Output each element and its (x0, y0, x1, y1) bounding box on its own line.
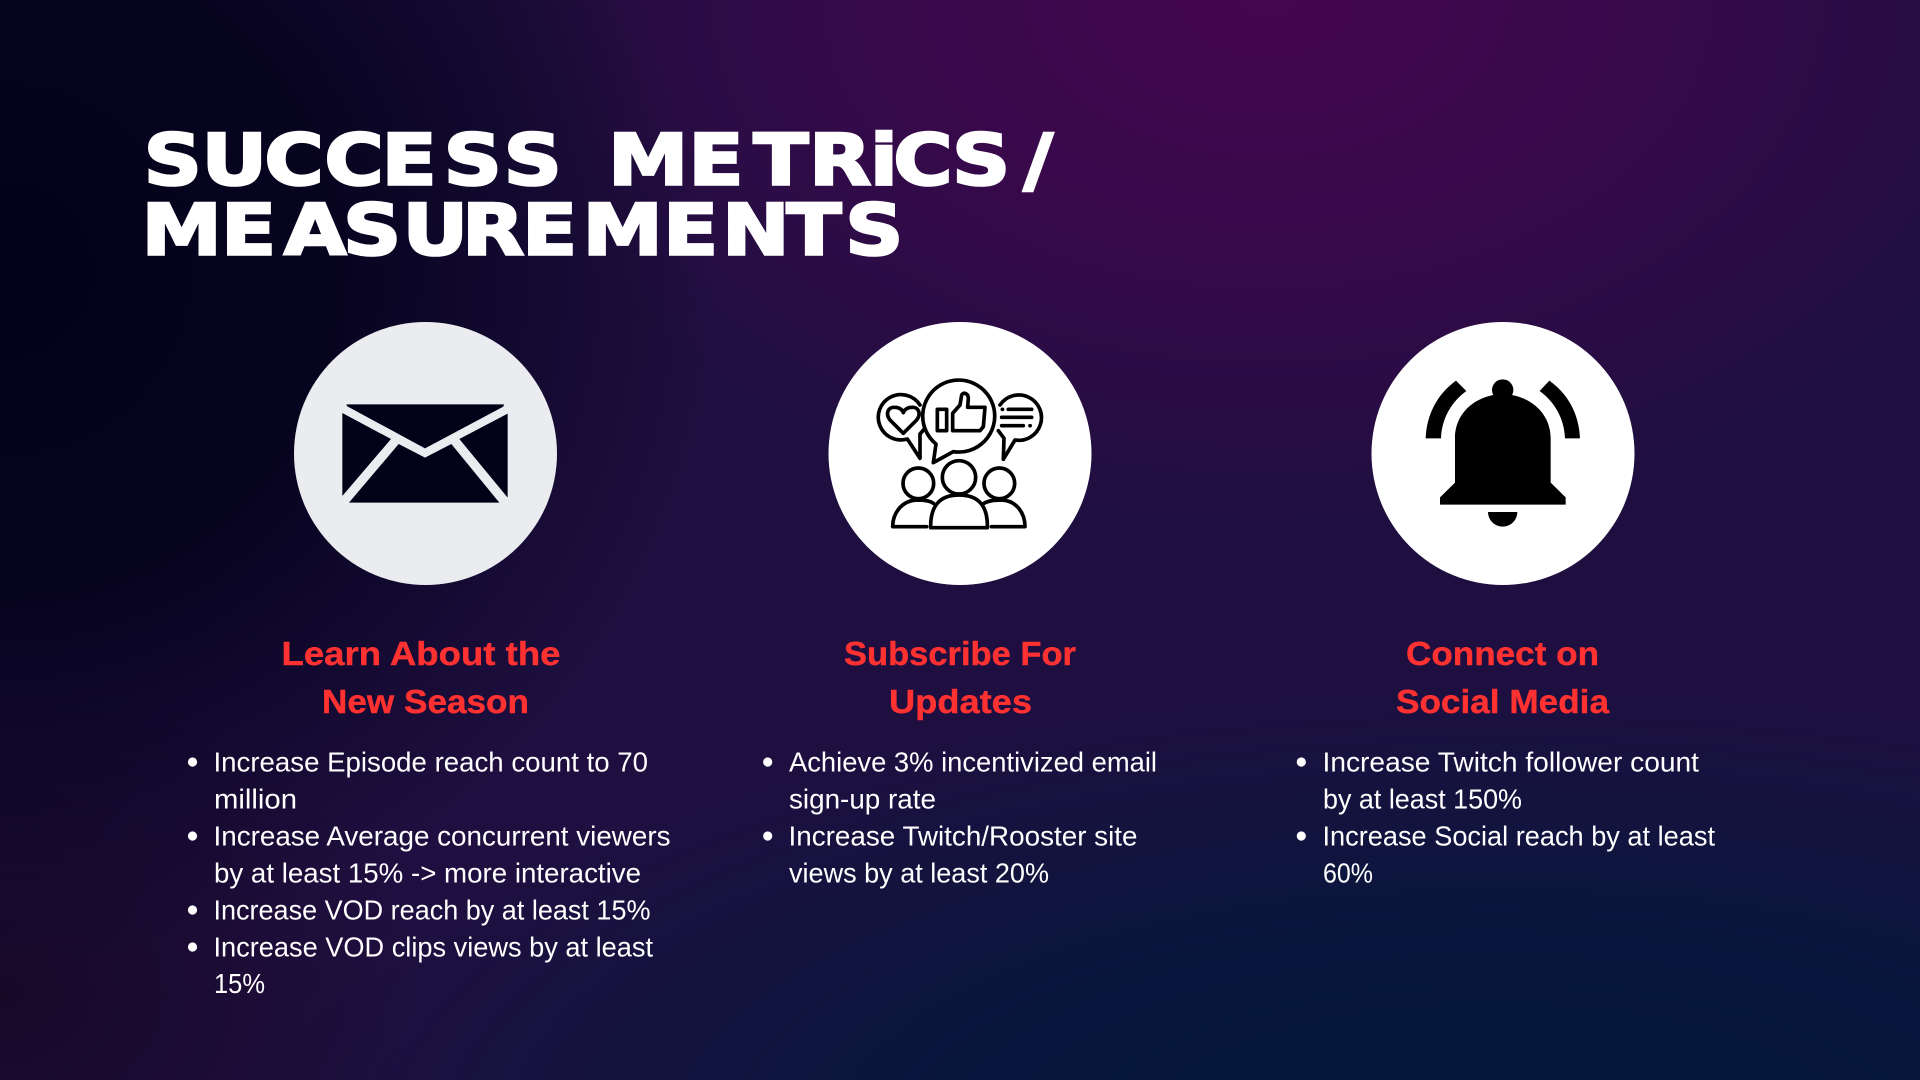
bullet list: subscription metrics: sign-up rate (789, 784, 936, 814)
bullet list: social metrics (1297, 746, 1715, 888)
title: SUCCESS METRiCS/ (144, 120, 1053, 201)
bullet list: episode metrics: Increase Average concurrent viewers (214, 820, 670, 852)
bullet list: subscription metrics: views by at least 20% (789, 858, 1049, 888)
icon: notification bell (1372, 322, 1634, 585)
heading: connect on social media: Connect on (1406, 635, 1599, 672)
heading: learn about the new season (282, 635, 560, 720)
panel: connect on social media (1297, 322, 1715, 888)
heading: subscribe for updates (844, 635, 1076, 720)
bullet list: social metrics: Increase Social reach by at least (1322, 820, 1715, 852)
bullet list: social metrics: by at least 150% (1323, 784, 1522, 814)
bullet list: episode metrics: Increase VOD clips views by at least (214, 932, 653, 962)
bullet list: social metrics: 60% (1323, 858, 1373, 888)
bullet list: subscription metrics: Achieve 3% incentivized email (789, 746, 1157, 778)
panel: learn about the new season (188, 322, 670, 999)
bullet list: episode metrics: Increase Episode reach count to 70 (214, 746, 648, 778)
heading: learn about the new season: New Season (322, 683, 529, 720)
title: MEASUREMENTS (142, 190, 903, 271)
bullet list: subscription metrics (763, 746, 1157, 888)
bullet list: episode metrics (188, 746, 670, 999)
title (142, 120, 1053, 271)
panel: subscribe for updates (763, 322, 1157, 888)
icon: community reactions (828, 322, 1092, 585)
bullet list: episode metrics: Increase VOD reach by at least 15% (214, 894, 650, 926)
heading: learn about the new season: Learn About the (282, 635, 560, 672)
heading: subscribe for updates: Subscribe For (844, 635, 1076, 672)
heading: subscribe for updates: Updates (889, 683, 1032, 720)
heading: connect on social media (1396, 635, 1610, 720)
bullet list: episode metrics: 15% (214, 968, 265, 999)
heading: connect on social media: Social Media (1396, 683, 1610, 720)
bullet list: subscription metrics: Increase Twitch/Rooster site (788, 820, 1138, 852)
bullet list: social metrics: Increase Twitch follower count (1322, 746, 1699, 778)
icon: envelope (294, 322, 557, 585)
bullet list: episode metrics: by at least 15% -> more interactive (214, 858, 641, 888)
bullet list: episode metrics: million (214, 784, 297, 814)
